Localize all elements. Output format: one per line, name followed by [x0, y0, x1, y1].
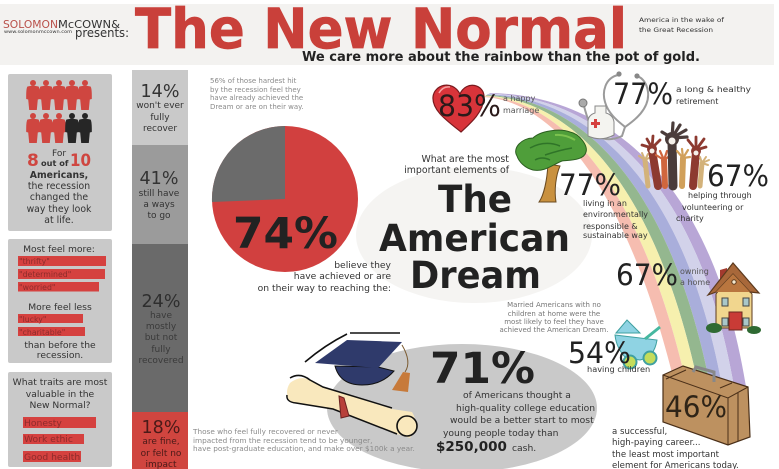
stat: 83% happy marriage: a happy — [503, 94, 536, 103]
pie chart: 74% — [212, 126, 358, 272]
segment: 14% — [132, 70, 188, 145]
segment: 41%: 41% — [140, 169, 178, 189]
note: hardest hit — [210, 77, 304, 111]
segment: 24%: but not — [145, 333, 178, 343]
stat: 71% college education: $250,000 — [436, 439, 507, 455]
stat: 67% owning a home: 67% — [616, 258, 678, 292]
note: fully recovered: Those who feel fully recovered or never — [192, 427, 338, 436]
heading: what are the most important elements: important elements of — [404, 165, 510, 176]
stat: 77% retirement: retirement — [676, 97, 718, 106]
icon: graduation cap and diploma — [287, 333, 417, 438]
heading: The American Dream: The — [438, 178, 512, 221]
segment: 41%: to go — [147, 211, 171, 221]
note: hardest hit: by the recession feel they — [210, 86, 301, 94]
note: married Americans — [500, 301, 608, 334]
heading: The American Dream: American — [379, 217, 570, 260]
panel text: the recession — [28, 181, 90, 192]
panel text: Americans, — [30, 170, 88, 181]
segment: 24%: fully — [151, 345, 171, 355]
stat: 71% college education: 71% — [430, 344, 535, 394]
panel: 8 out of 10 Americans — [8, 74, 112, 231]
pie chart: 74%: 74% — [233, 209, 338, 259]
note: married Americans: children at home were the — [508, 310, 600, 318]
stat: 54% having children: having children — [587, 364, 650, 374]
panel text: 10 — [70, 151, 91, 171]
note: hardest hit: Dream or are on their way. — [210, 103, 304, 111]
segment: 24%: have — [150, 311, 172, 321]
bars: feel less: "charitable" — [19, 328, 65, 337]
bars: feel less: "lucky" — [19, 315, 46, 324]
stat: 67% volunteering: 67% — [707, 159, 769, 193]
segment: 14%: 14% — [141, 82, 179, 102]
stat: 71% college education: cash. — [512, 443, 536, 454]
bars: feel more — [18, 256, 106, 292]
stat: 67% owning a home — [616, 258, 710, 292]
bars: traits: Work ethic — [24, 434, 73, 445]
icon: baby carriage — [615, 320, 660, 368]
stat: 77% retirement — [613, 77, 751, 111]
panel: valuable traits: What traits are most — [13, 377, 108, 388]
bars: feel more: "determined" — [19, 270, 71, 279]
caption: believe they have achieved: believe they — [334, 260, 392, 271]
segment: 24% — [132, 244, 188, 412]
note: hardest hit: have already achieved the — [210, 94, 303, 102]
stat: 77% environment: sustainable way — [583, 231, 648, 240]
stat: 67% owning a home: a home — [680, 278, 710, 287]
note: hardest hit: 56% of those hardest hit — [210, 77, 297, 85]
logo: Solomon McCown presents — [3, 19, 129, 40]
segment: 41%: a ways — [143, 200, 175, 210]
icon: tree — [516, 130, 586, 202]
bars: feel less — [18, 314, 85, 337]
panel text: way they look — [27, 204, 92, 215]
caption: believe they have achieved — [258, 260, 392, 294]
panel text: at life. — [44, 215, 74, 226]
icon: stethoscope and bottle — [579, 71, 648, 139]
background ellipse: college stat — [327, 344, 597, 469]
panel: feel more / feel less: Most feel more: — [23, 244, 95, 255]
background ellipse: American Dream — [356, 167, 592, 303]
note: fully recovered — [192, 427, 415, 453]
stat: 46% career: the least most important — [612, 450, 720, 460]
stat: 77% environment: environmentally — [583, 210, 648, 219]
panel: feel more / feel less — [8, 239, 112, 363]
bars: traits: Honesty — [24, 418, 62, 429]
stat: 77% environment: responsible & — [583, 222, 638, 231]
panel: feel more / feel less: than before the — [24, 340, 96, 351]
panel: valuable traits: New Normal? — [29, 400, 91, 411]
header note: America in the wake of — [639, 17, 725, 24]
segment: 24%: mostly — [146, 322, 177, 332]
stat: 71% college education — [430, 344, 595, 455]
note: married Americans: achieved the American Dream. — [500, 326, 608, 334]
stat: 71% college education: of Americans thought a — [463, 390, 571, 401]
segment: 41% — [132, 145, 188, 244]
stat: 67% volunteering: charity — [676, 214, 704, 223]
stat: 77% retirement: a long & healthy — [676, 85, 751, 94]
heading: what are the most important elements: What are the most — [421, 154, 509, 165]
stacked bar: recovery — [132, 70, 188, 469]
caption: believe they have achieved: on their way to reaching the: — [258, 283, 391, 294]
panel text: 8 — [27, 151, 39, 171]
logo: Solomon McCown presents: SOLOMON — [3, 19, 58, 31]
stat: 67% volunteering: helping through — [688, 191, 752, 200]
stat: 71% college education: would be a better start to most — [450, 415, 594, 426]
stat: 71% college education: high-quality college education — [456, 403, 595, 414]
bars: feel more: "thrifty" — [19, 257, 50, 266]
note: married Americans: Married Americans with no — [507, 301, 601, 309]
stat: 46% career — [612, 390, 739, 469]
heading: The American Dream: Dream — [410, 254, 541, 297]
panel: valuable traits: valuable in the — [26, 389, 95, 400]
panel: valuable traits — [8, 372, 112, 467]
note: fully recovered: impacted from the recession tend to be younger, — [193, 436, 373, 445]
segment: 18%: or felt no — [141, 449, 182, 459]
stat: 54% having children: 54% — [568, 336, 631, 370]
stat: 77% environment: 77% — [559, 168, 621, 202]
stat: 67% volunteering — [676, 159, 769, 223]
segment: 14%: fully — [150, 113, 170, 123]
panel text — [27, 149, 92, 226]
stat: 46% career: high-paying career... — [612, 438, 701, 448]
icon: briefcase — [663, 366, 750, 445]
stat: 83% happy marriage: marriage — [503, 106, 539, 115]
segment: 24%: 24% — [142, 292, 180, 312]
note: fully recovered: have post-graduate education, and make over $100k a year. — [193, 444, 415, 453]
panel: feel more / feel less: More feel less — [28, 302, 92, 313]
stat: 77% environment: living in an — [583, 199, 627, 208]
heading: The American Dream — [379, 178, 570, 297]
segment: 18%: are fine, — [142, 437, 180, 447]
segment: 14%: recover — [143, 124, 177, 134]
logo: Solomon McCown presents: presents: — [75, 26, 129, 40]
bars: traits: Good health — [24, 452, 80, 463]
panel text: out of — [41, 158, 69, 168]
caption: believe they have achieved: have achieved or are — [294, 271, 391, 282]
segment: 24%: recovered — [138, 356, 184, 366]
segment: 18% — [132, 412, 188, 469]
icon: rows of people — [26, 80, 92, 143]
icon: heart — [433, 85, 484, 132]
icon: house — [706, 263, 761, 334]
bars: feel more: "worried" — [19, 283, 56, 292]
panel text: changed the — [30, 192, 88, 203]
logo: Solomon McCown presents: McCOWN& — [58, 19, 120, 31]
stat: 46% career: 46% — [665, 390, 727, 424]
stat: 67% volunteering: volunteering or — [682, 203, 744, 212]
header note — [639, 17, 725, 34]
stat: 67% owning a home: owning — [680, 267, 709, 276]
panel text: For — [52, 149, 66, 159]
segment: 41%: still have — [139, 189, 180, 199]
note: married Americans: most likely to feel they have — [504, 318, 604, 326]
header note: the Great Recession — [639, 27, 713, 34]
panel: feel more / feel less: recession. — [37, 350, 83, 361]
heading: what are the most important elements — [404, 154, 510, 176]
stat: 83% happy marriage: 83% — [438, 89, 501, 123]
rainbow — [483, 93, 748, 400]
bars: traits — [23, 417, 96, 463]
stat: 71% college education: young people today than — [443, 428, 559, 439]
icon: raised hands — [639, 123, 709, 186]
header band — [0, 0, 774, 65]
segment: 18%: 18% — [142, 418, 180, 438]
subtitle: We care more about the rainbow than the pot of gold. — [302, 50, 700, 65]
segment: 14%: won't ever — [136, 101, 184, 111]
stat: 46% career: a successful, — [612, 427, 667, 437]
stat: 77% environment — [559, 168, 648, 240]
stat: 77% retirement: 77% — [613, 77, 673, 111]
logo: Solomon McCown presents: www.solomonmccown.com — [4, 29, 72, 35]
stat: 83% happy marriage — [438, 89, 539, 123]
